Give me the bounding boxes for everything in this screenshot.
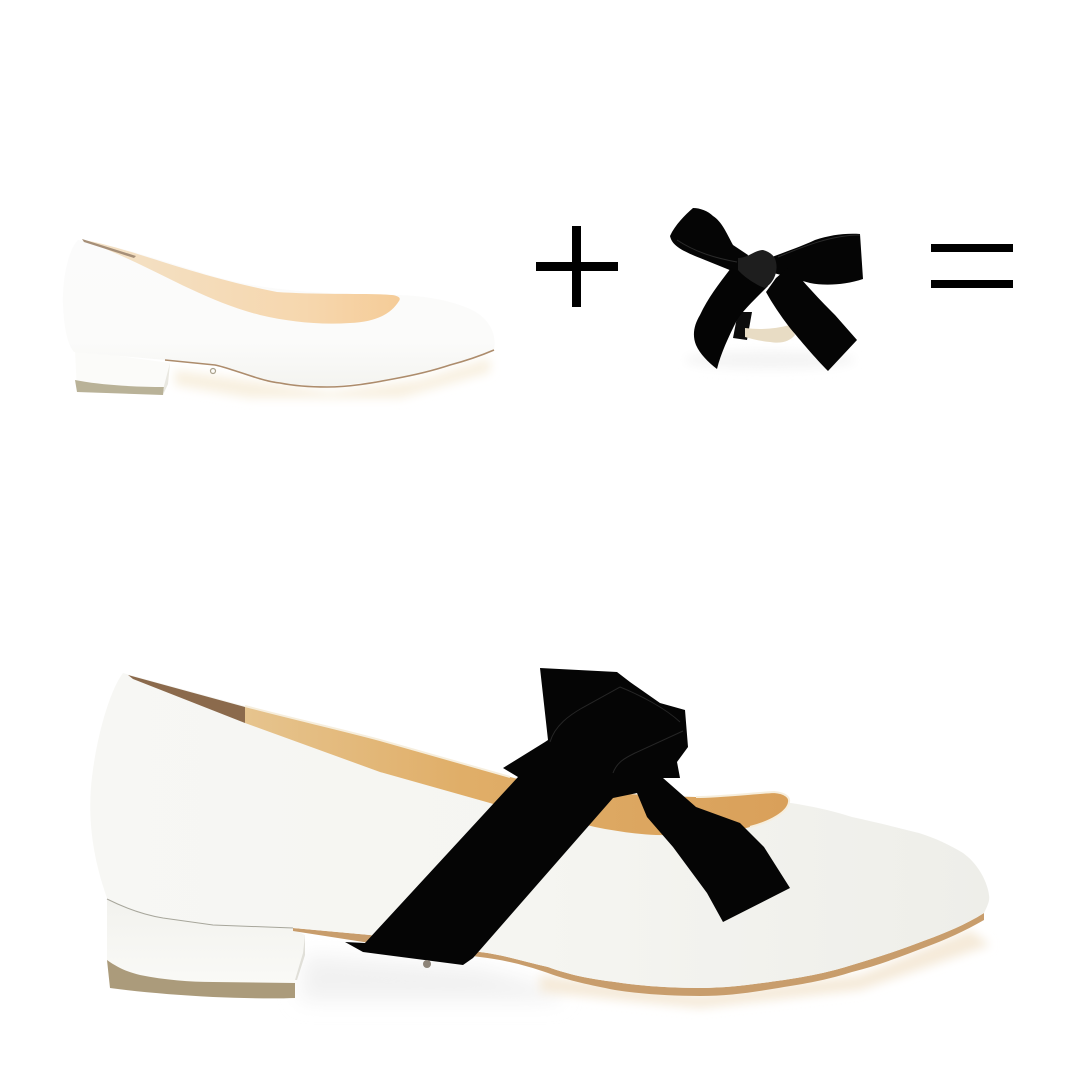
heel <box>75 350 170 395</box>
collar lining <box>128 675 245 723</box>
sole edge <box>165 350 494 387</box>
plus sign <box>536 226 618 307</box>
knot <box>738 250 777 288</box>
topline rim <box>245 706 789 827</box>
collar lining <box>82 239 136 258</box>
upper <box>63 240 495 387</box>
equals sign <box>931 244 1013 288</box>
sole edge <box>293 913 984 996</box>
black velvet bow <box>670 208 863 371</box>
heel seam <box>107 899 293 928</box>
left tail <box>694 268 768 369</box>
ribbon fold highlights <box>550 687 683 773</box>
upper <box>90 673 989 988</box>
inner strap <box>733 312 795 343</box>
metal charm <box>210 368 216 374</box>
shoe shadow <box>175 358 490 398</box>
bow edge highlights <box>677 235 860 262</box>
metal charm <box>423 960 431 968</box>
insole <box>245 706 789 835</box>
right loop <box>770 234 863 285</box>
black velvet ribbon <box>345 668 790 968</box>
heel <box>107 900 305 998</box>
ribbon silhouette <box>345 668 790 965</box>
left loop <box>670 208 748 275</box>
right tail <box>766 266 857 371</box>
grey shadow under arch <box>300 955 560 1000</box>
bow shadow <box>685 351 855 369</box>
white flat shoe <box>63 239 495 398</box>
insole <box>84 240 400 324</box>
white shoe with black bow <box>90 668 990 1008</box>
warm shadow under sole <box>540 930 990 1008</box>
